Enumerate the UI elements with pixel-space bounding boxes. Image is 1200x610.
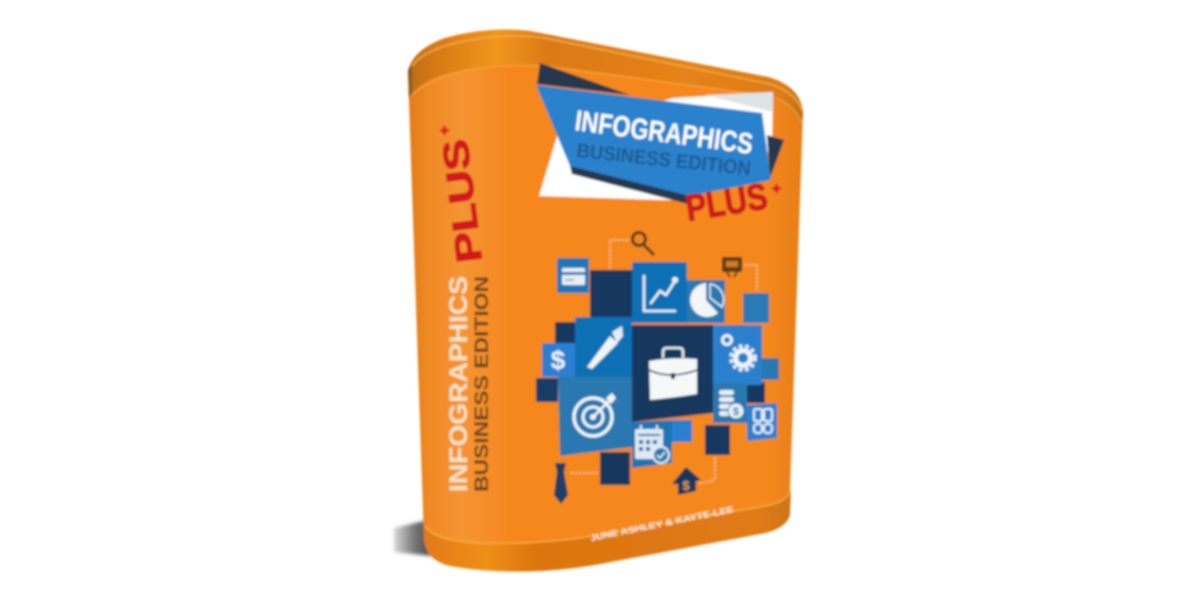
icon: necktie [554,463,568,504]
icon: credit card [562,268,585,285]
icon: coins: $ [733,406,739,418]
icon: line chart [644,276,677,311]
icon mosaic [536,232,779,504]
box base rim [424,490,791,572]
icon: house with dollar: $ [682,478,690,493]
spine text [434,126,493,492]
spine subtitle: BUSINESS EDITION: BUSINESS EDITION [472,276,493,492]
icon: grid organiser [754,409,772,433]
box lid [408,30,803,127]
icon: pen [587,326,623,369]
dark ribbon folds [537,63,784,204]
icon: briefcase [649,348,697,400]
heading: PLUS: PLUS [683,176,770,229]
heading: INFOGRAPHICS: INFOGRAPHICS [573,105,755,161]
box body [408,30,803,572]
icon: target [574,393,616,436]
icon: calendar [635,425,669,463]
white backing panel [539,92,773,200]
icon: presentation board [722,257,742,277]
spine plus star [440,126,449,135]
icon: gears [722,336,755,370]
icon: pie chart [690,283,724,317]
icon: dollar sign: $ [551,345,566,375]
author credit: JUNE ASHLEY & KAYTE-LEE [589,504,735,543]
mosaic tiles [536,258,779,485]
cast shadow [394,520,432,556]
banner: title ribbon [536,63,784,229]
spine heading: PLUS: PLUS [434,137,490,265]
connector dots [571,240,757,483]
icon: coins [719,390,744,419]
subheading: BUSINESS EDITION: BUSINESS EDITION [575,140,752,180]
icon: magnifier [632,232,654,255]
spine title: INFOGRAPHICS: INFOGRAPHICS [445,276,473,492]
plus star [772,184,781,193]
icon: house with dollar [672,467,701,495]
blue ribbon [536,85,771,196]
